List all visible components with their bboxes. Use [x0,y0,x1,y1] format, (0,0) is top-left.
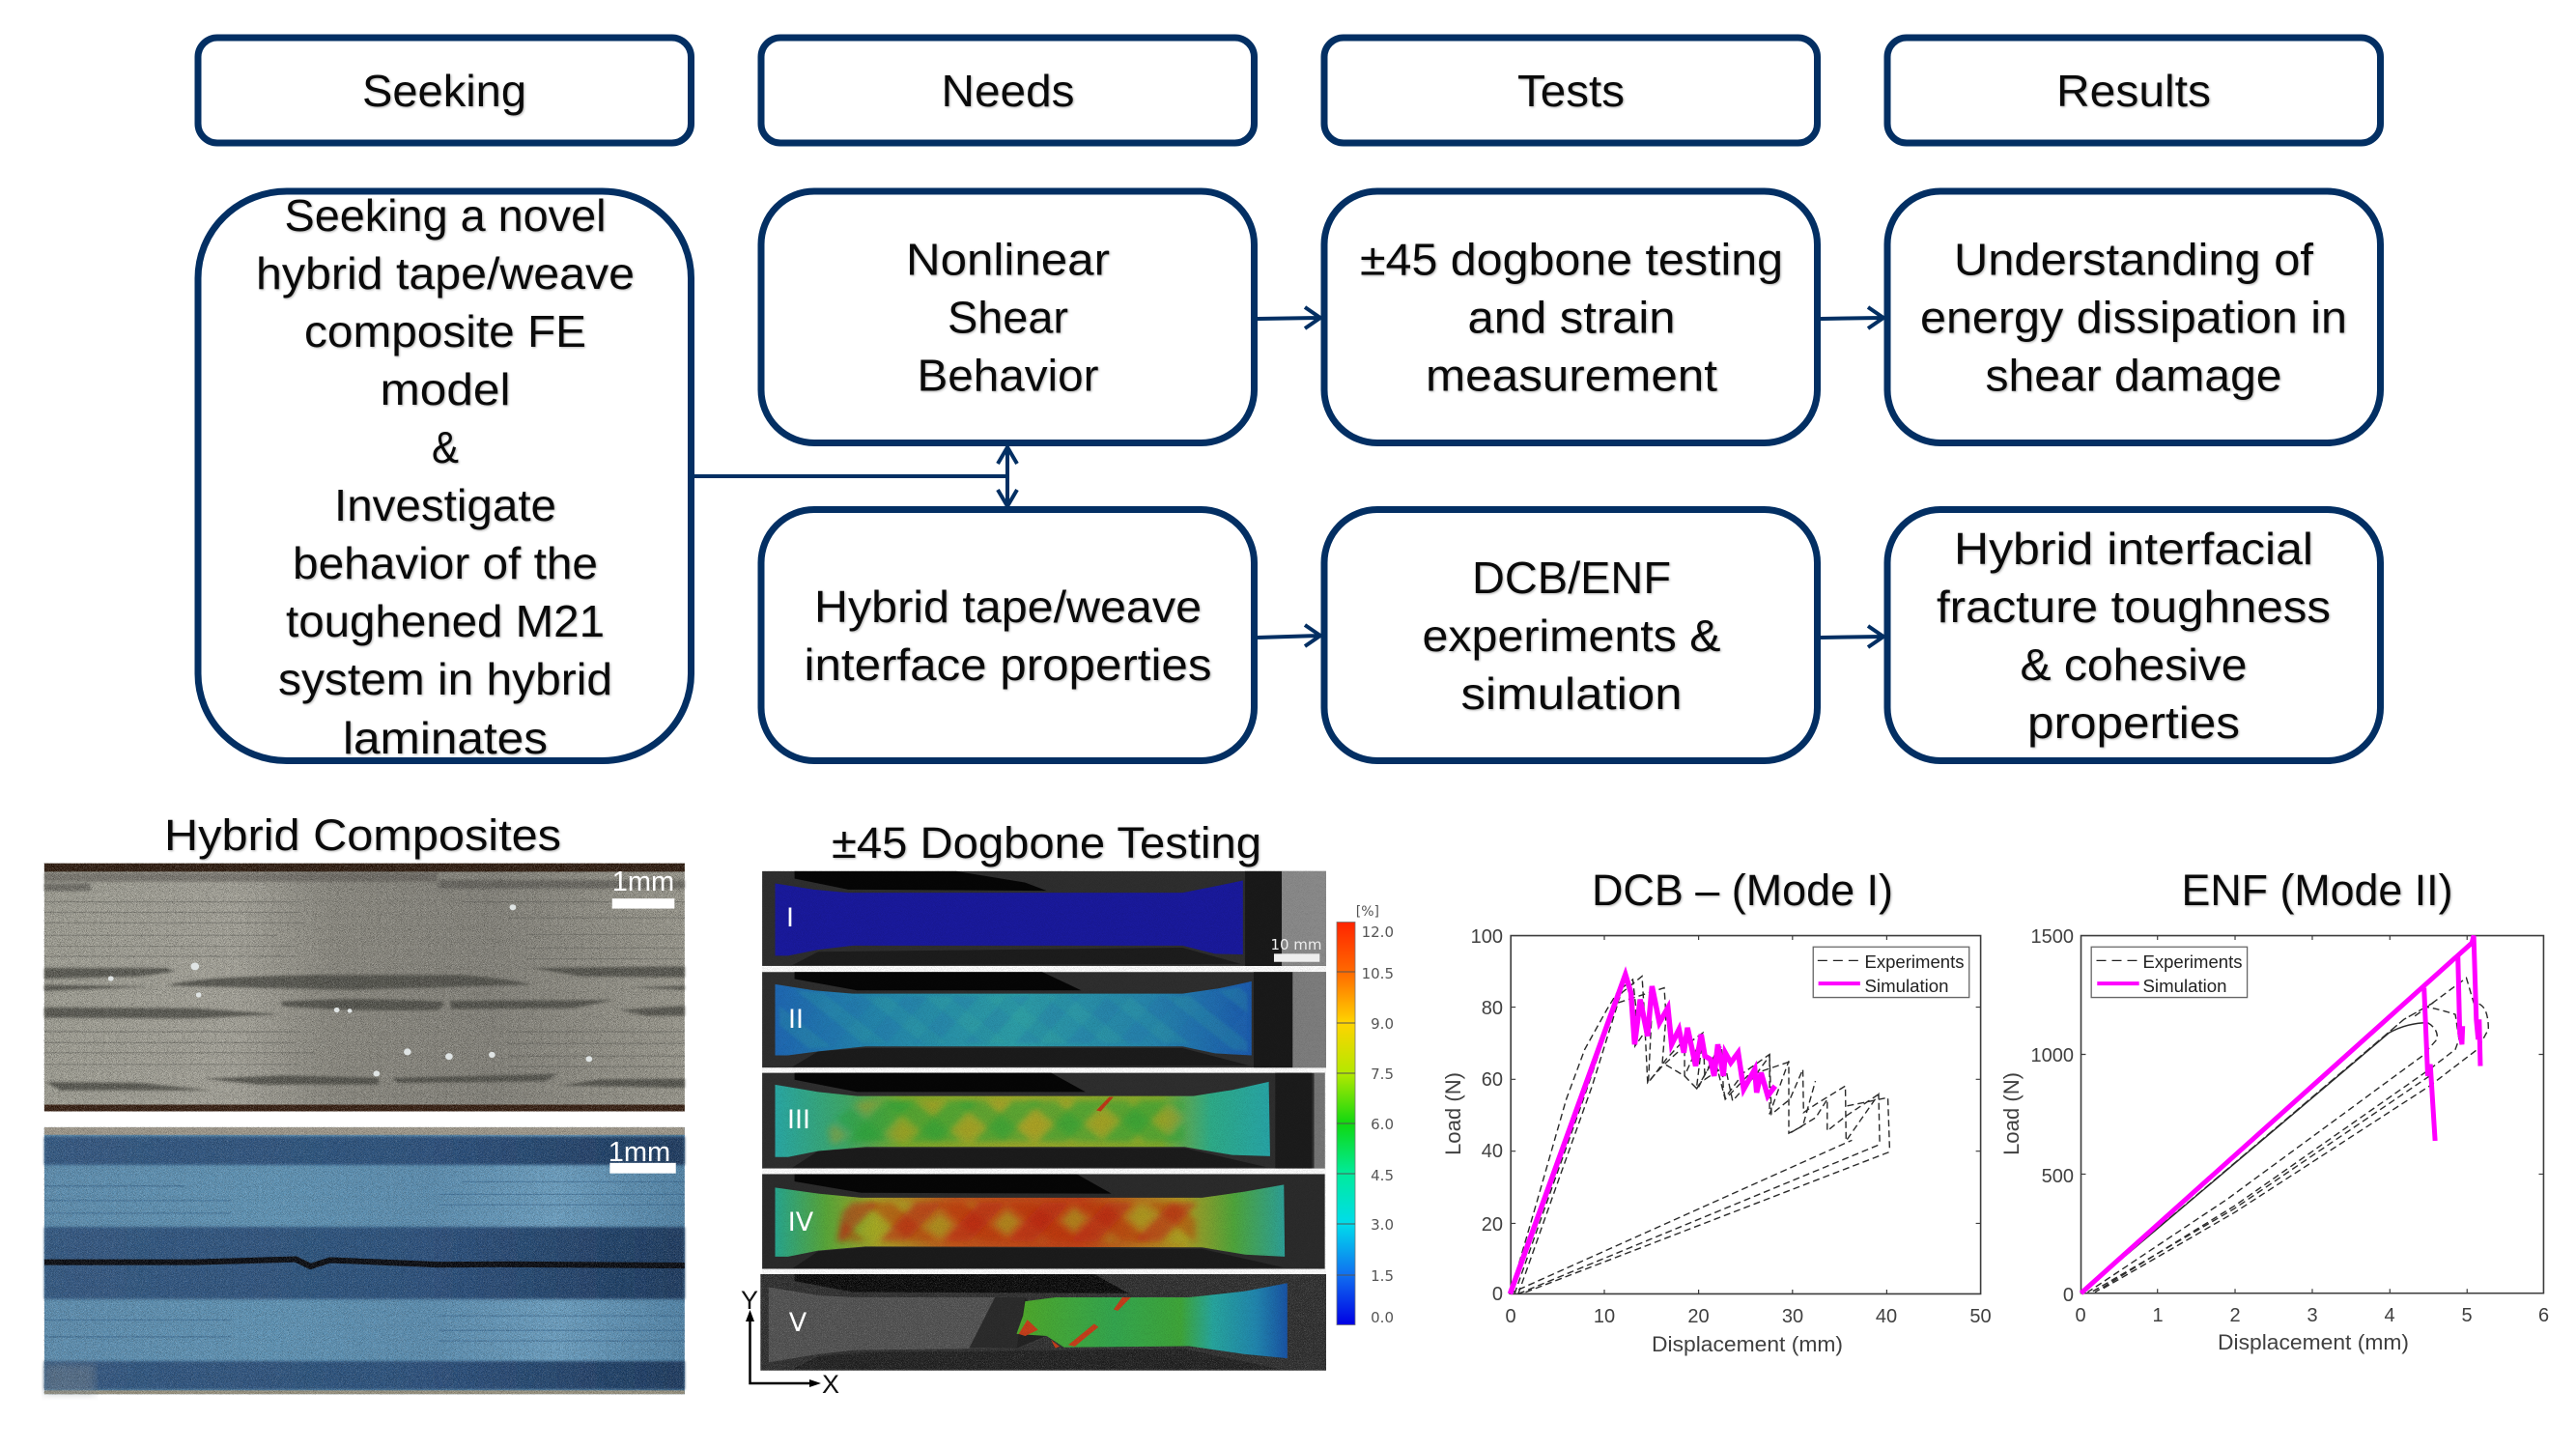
chart: DCB load vs displacement: 60 [1482,1069,1503,1091]
chart: ENF load vs displacement: 0 [2075,1305,2086,1326]
XY axes icon: X [822,1370,839,1399]
chart: ENF load vs displacement: Simulation [2142,977,2227,996]
XY axes icon: Y [741,1286,758,1315]
panel: nonlinear shear behavior [761,191,1254,442]
header: Seeking [198,38,692,143]
panel: seeking statement: laminates [343,713,548,763]
arrow: interface need to DCB/ENF [1258,625,1320,646]
chart: DCB load vs displacement: 40 [1482,1141,1503,1162]
chart: DCB load vs displacement [1441,926,1992,1356]
specimen stage III [762,1073,1325,1169]
chart: DCB load vs displacement: 40 [1876,1306,1897,1327]
image: dogbone strain stages: I [786,903,794,933]
panel: dogbone testing: and strain [1468,292,1675,342]
specimen stage V [760,1274,1326,1371]
panel: nonlinear shear behavior: Shear [948,292,1068,342]
chart: DCB load vs displacement: 50 [1969,1306,1992,1327]
chart: DCB load vs displacement: 20 [1687,1306,1710,1327]
chart: DCB load vs displacement: Displacement (mm) [1652,1332,1843,1356]
header: Needs: Needs [941,66,1074,116]
panel: dogbone testing: ±45 dogbone testing [1360,234,1783,284]
panel: fracture toughness result: fracture toughness [1937,582,2331,632]
chart: ENF load vs displacement: 1500 [2030,926,2074,948]
colour scale legend: [%] [1356,904,1379,920]
panel: DCB/ENF experiments: DCB/ENF [1472,553,1671,603]
heading: ±45 Dogbone Testing: ±45 Dogbone Testing [832,818,1261,867]
colour scale legend: 10.5 [1362,965,1394,982]
arrow: dogbone test to result [1821,307,1883,328]
colour scale legend: 3.0 [1371,1216,1394,1234]
image: dogbone strain stages [760,871,1326,1371]
image: grey micrograph: 1mm [612,867,674,897]
chart: ENF load vs displacement: Experiments [2142,952,2243,972]
panel: energy dissipation result: shear damage [1986,350,2281,400]
chart: DCB load vs displacement: Experiments [1864,952,1965,972]
panel: interface properties [761,510,1254,761]
panel: seeking statement: system in hybrid [278,654,612,704]
colour scale legend [1337,904,1394,1326]
specimen stage IV [762,1174,1325,1269]
specimen stage I [762,871,1326,966]
chart: DCB load vs displacement: 80 [1482,998,1503,1019]
chart: DCB load vs displacement: 20 [1482,1214,1503,1236]
chart: ENF load vs displacement: 500 [2042,1166,2074,1187]
chart: ENF load vs displacement: 0 [2063,1285,2074,1306]
panel: DCB/ENF experiments: simulation [1460,668,1683,719]
panel: seeking statement: behavior of the [293,538,598,588]
image: grey micrograph [44,864,685,1111]
XY axes icon [741,1286,839,1399]
image: dogbone strain stages: IV [788,1208,814,1237]
panel: interface properties: Hybrid tape/weave [814,582,1202,632]
specimen stage II [762,972,1326,1067]
chart: ENF load vs displacement: 4 [2384,1305,2395,1326]
experiment curves [1509,977,1889,1293]
experiment curves [2081,1003,2433,1293]
heading: ENF Mode II: ENF (Mode II) [2181,866,2453,915]
panel: interface properties: interface properties [804,639,1211,690]
colour scale legend: 1.5 [1371,1267,1394,1285]
arrow: seeking to needs, double headed [694,447,1017,506]
chart: DCB load vs displacement: 0 [1492,1284,1503,1305]
panel: energy dissipation result [1887,191,2380,442]
header: Results [1887,38,2380,143]
chart: ENF load vs displacement: 1 [2152,1305,2164,1326]
chart: ENF load vs displacement: Displacement (mm) [2218,1330,2409,1354]
panel: seeking statement: Seeking a novel [284,190,607,241]
panel: energy dissipation result: Understanding of [1954,234,2313,284]
chart: ENF load vs displacement: Load (N) [1999,1072,2024,1155]
panel: DCB/ENF experiments [1324,510,1818,761]
panel: seeking statement: model [381,364,510,414]
panel: nonlinear shear behavior: Nonlinear [906,234,1110,284]
image: dogbone strain stages: 10 mm [1270,936,1322,953]
simulation curve [2081,936,2480,1293]
arrow: shear need to dogbone test [1258,307,1320,328]
chart: ENF load vs displacement: 2 [2229,1305,2241,1326]
panel: dogbone testing [1324,191,1818,442]
image: blue fluorescence micrograph: 1mm [609,1137,670,1168]
chart: DCB load vs displacement: 0 [1505,1306,1516,1327]
chart: ENF load vs displacement: 1000 [2030,1045,2074,1066]
heading: DCB Mode I: DCB – (Mode I) [1592,866,1893,915]
panel: dogbone testing: measurement [1426,350,1717,400]
chart: DCB load vs displacement: Simulation [1864,977,1949,996]
panel: seeking statement: toughened M21 [286,596,605,646]
colour scale legend: 9.0 [1371,1015,1394,1033]
colour scale legend: 6.0 [1371,1116,1394,1133]
colour scale legend: 4.5 [1371,1167,1394,1184]
chart: ENF load vs displacement: 3 [2307,1305,2318,1326]
panel: seeking statement: hybrid tape/weave [256,248,635,298]
chart: DCB load vs displacement: 10 [1594,1306,1615,1327]
header: Seeking: Seeking [362,66,526,116]
panel: seeking statement: Investigate [334,480,556,530]
heading: Hybrid Composites: Hybrid Composites [164,810,561,860]
panel: seeking statement [198,190,692,763]
arrow: DCB/ENF to result [1821,626,1883,647]
chart: ENF load vs displacement [1999,926,2549,1354]
panel: fracture toughness result: Hybrid interfacial [1954,524,2313,574]
image: dogbone strain stages: II [788,1005,804,1035]
panel: energy dissipation result: energy dissipation in [1920,292,2347,342]
panel: fracture toughness result: properties [2027,697,2240,748]
panel: fracture toughness result [1887,510,2380,761]
panel: DCB/ENF experiments: experiments & [1422,611,1721,661]
panel: seeking statement: & [432,422,459,472]
header: Tests [1324,38,1818,143]
header: Needs [761,38,1254,143]
colour scale legend: 7.5 [1371,1065,1394,1083]
panel: nonlinear shear behavior: Behavior [918,350,1099,400]
simulation curve [1510,975,1775,1293]
chart: ENF load vs displacement: 5 [2461,1305,2473,1326]
colour scale legend: 0.0 [1371,1309,1394,1326]
panel: fracture toughness result: & cohesive [2021,639,2247,690]
chart: DCB load vs displacement: 30 [1782,1306,1803,1327]
image: dogbone strain stages: III [787,1105,810,1135]
header: Tests: Tests [1517,66,1625,116]
header: Results: Results [2056,66,2211,116]
panel: seeking statement: composite FE [304,306,586,356]
colour scale legend: 12.0 [1362,923,1394,941]
chart: ENF load vs displacement: 6 [2538,1305,2549,1326]
image: dogbone strain stages: V [789,1308,807,1338]
chart: DCB load vs displacement: Load (N) [1441,1072,1465,1155]
chart: DCB load vs displacement: 100 [1471,926,1503,948]
image: blue fluorescence micrograph [44,1127,685,1394]
